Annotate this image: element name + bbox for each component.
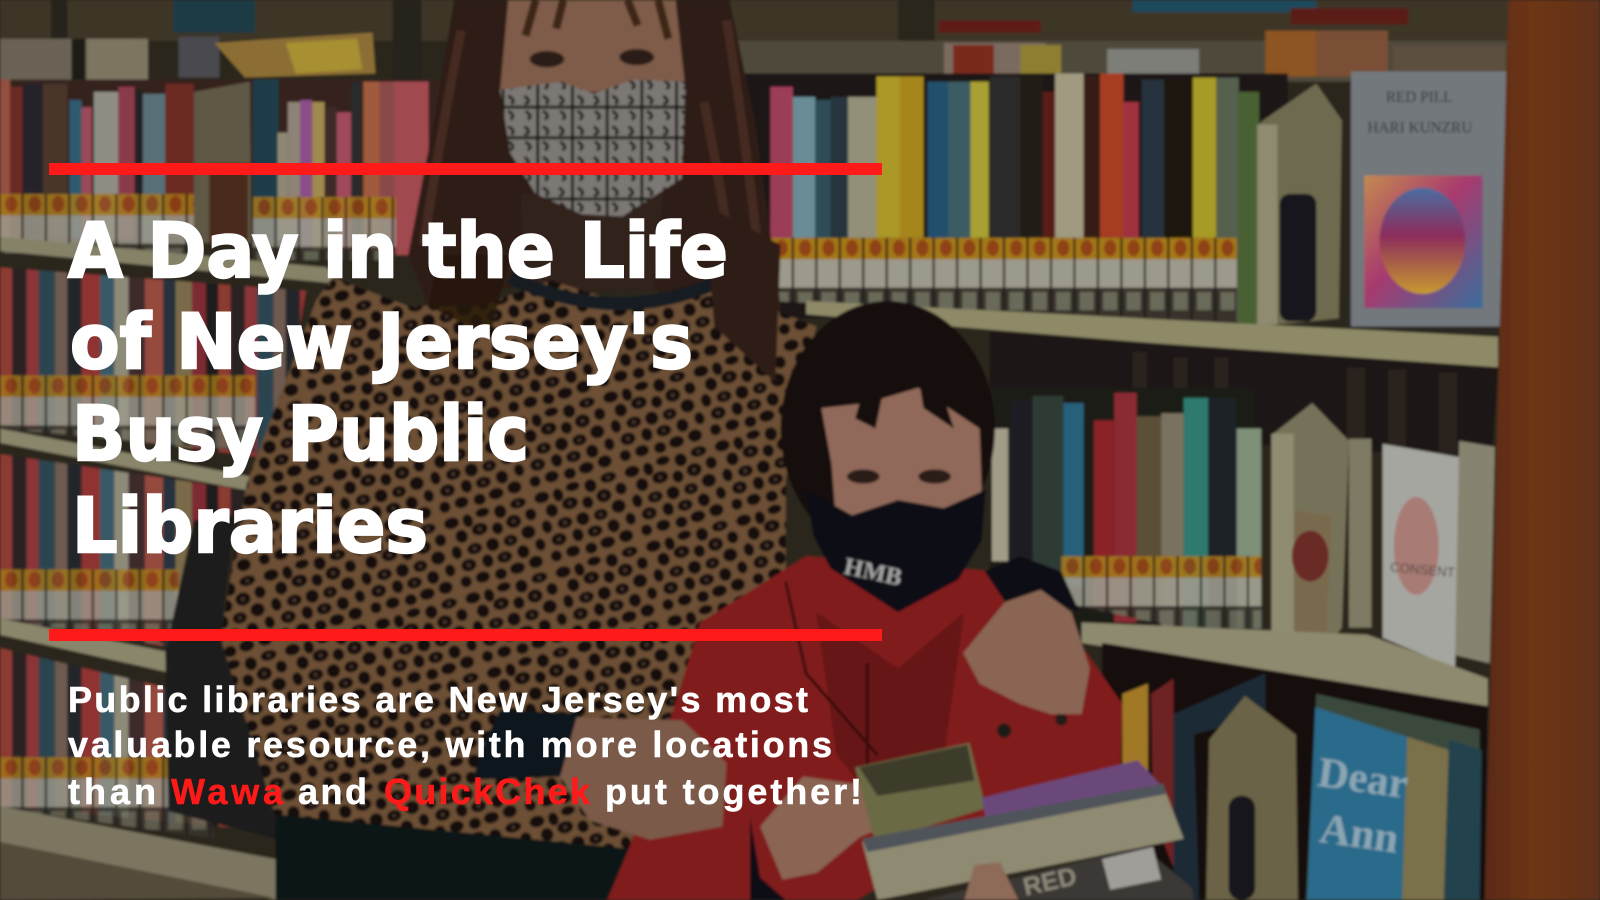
book stack and picture card <box>750 743 1194 900</box>
shelves and books, lower left <box>0 267 306 900</box>
subtitle text: and <box>298 771 367 812</box>
title: A Day in the Life <box>68 206 728 295</box>
subtitle text: Wawa <box>171 771 284 812</box>
boy in red jacket and black mask <box>560 301 1122 900</box>
shelves and books, upper right: HARI KUNZRU <box>1367 120 1472 137</box>
bottom red rule <box>49 629 882 641</box>
shelves and books, upper right: RED PILL <box>1386 89 1452 106</box>
subtitle text: QuickChek <box>384 771 591 812</box>
shelves and books, lower right: Dear <box>1315 749 1411 808</box>
top red rule <box>49 163 882 175</box>
subtitle text: put together! <box>605 771 862 812</box>
shelves and books, lower right: CONSENT <box>1390 559 1455 580</box>
title: of New Jersey's <box>70 297 693 386</box>
subtitle text: Public libraries are New Jersey's most <box>68 679 808 720</box>
shelves and books, lower right: Ann <box>1317 805 1402 863</box>
woman in leopard sweater <box>220 0 816 900</box>
woman's hand on boy <box>560 717 727 840</box>
title: Busy Public <box>72 389 529 478</box>
title <box>68 206 728 570</box>
dark shoulder bag <box>165 515 276 839</box>
shelves and books, upper right <box>735 8 1510 367</box>
subtitle text <box>68 679 862 812</box>
subtitle text: valuable resource, with more locations <box>68 724 832 765</box>
shelves and books, upper left <box>0 33 791 284</box>
boy in red jacket and black mask: HMB <box>842 553 904 591</box>
wooden shelf pillar <box>1485 0 1600 900</box>
shelves and books, lower right <box>990 332 1498 900</box>
subtitle text: than <box>68 771 156 812</box>
title: Libraries <box>72 481 428 570</box>
